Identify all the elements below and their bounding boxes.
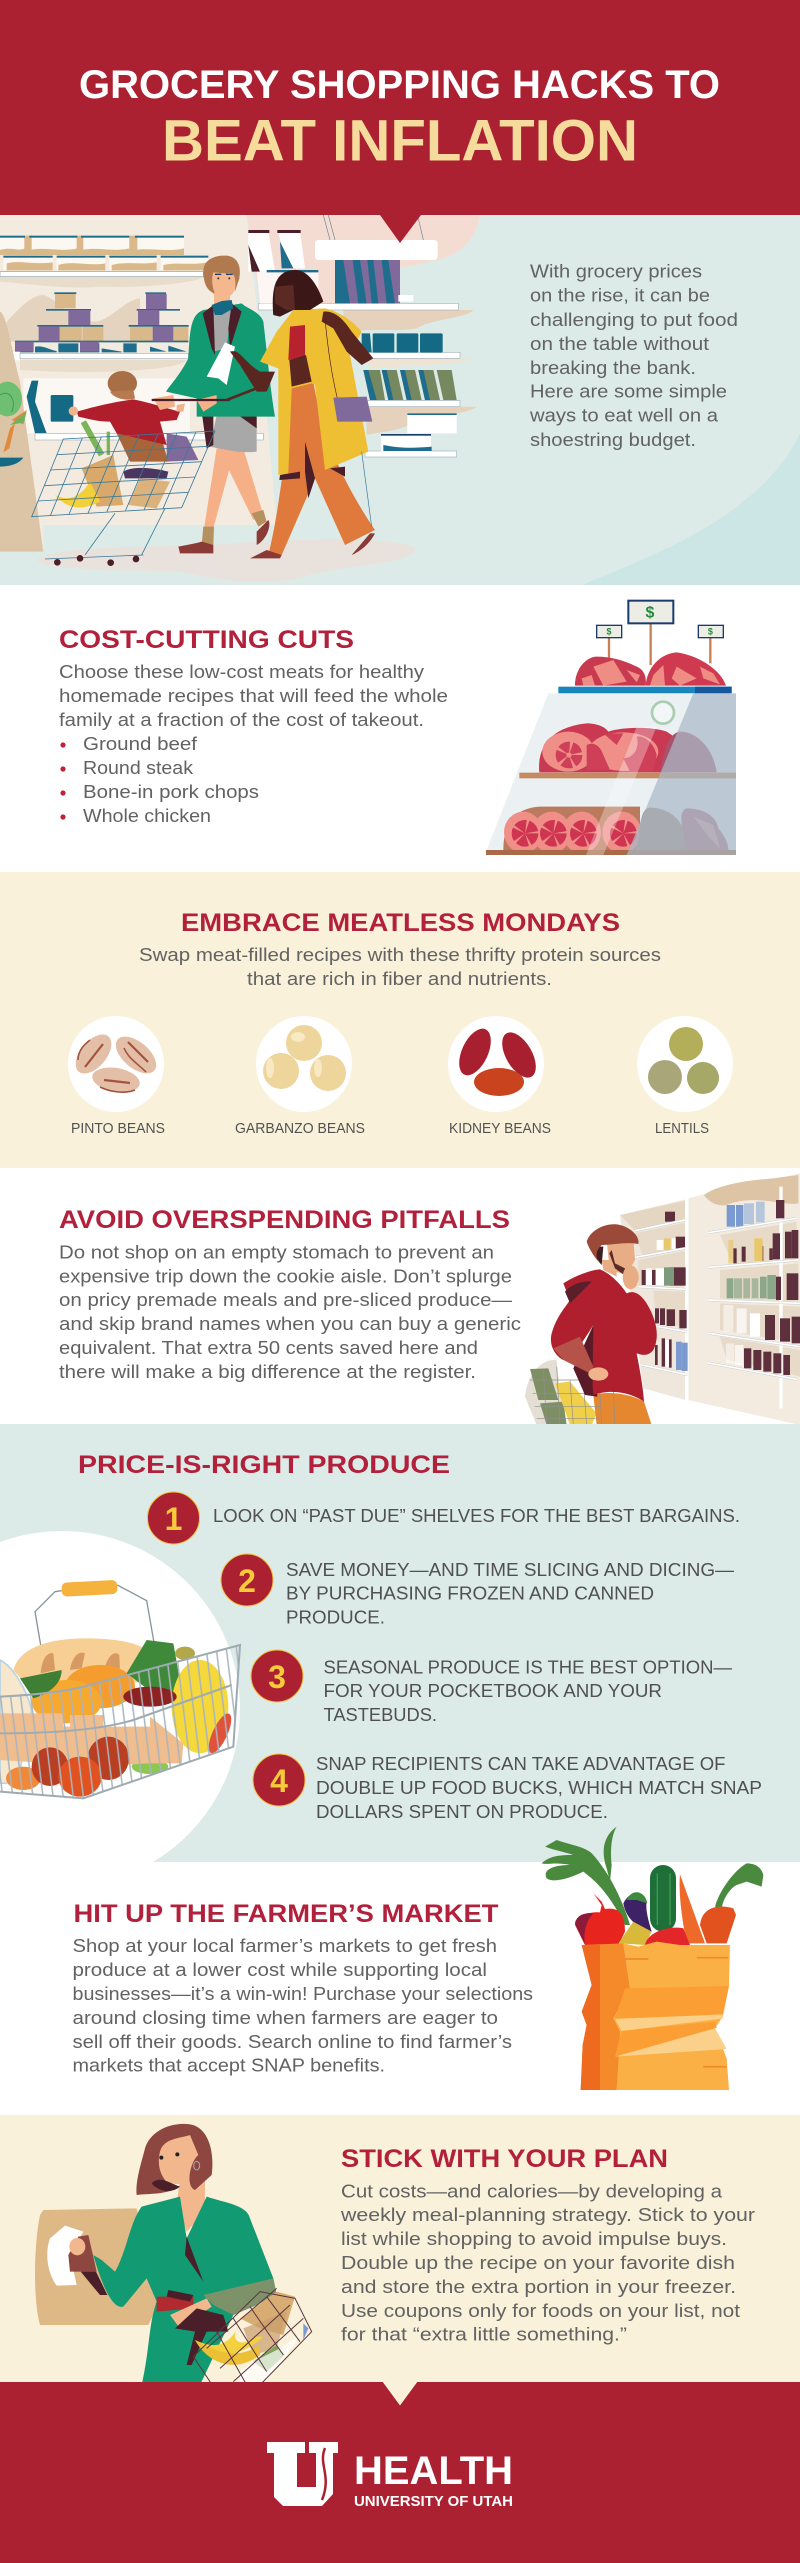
body text: list while shopping to avoid impulse buys. xyxy=(341,2229,727,2249)
subtitle xyxy=(139,945,661,989)
illustration: meat display case: $ xyxy=(646,605,655,622)
tip 3: TASTEBUDS. xyxy=(324,1705,437,1725)
tip 4: SNAP RECIPIENTS CAN TAKE ADVANTAGE OF xyxy=(316,1754,726,1774)
woman in yellow coat xyxy=(227,270,375,558)
body text and list xyxy=(59,662,448,826)
illustration: grocery bag with vegetables xyxy=(542,1827,763,2090)
pointer xyxy=(382,2381,418,2406)
body text: Cut costs—and calories—by developing a xyxy=(341,2182,723,2202)
body text: expensive trip down the cookie aisle. Don’t splurge xyxy=(59,1266,512,1286)
tip 2: SAVE MONEY—AND TIME SLICING AND DICING— xyxy=(286,1560,734,1580)
panel: embrace meatless mondays xyxy=(0,872,800,1168)
body text: produce at a lower cost while supporting local xyxy=(72,1960,487,1980)
body text: sell off their goods. Search online to find farmer’s xyxy=(72,2032,512,2052)
title banner: BEAT INFLATION xyxy=(162,109,638,174)
illustration: meat display case: $ xyxy=(606,626,611,636)
title banner: GROCERY SHOPPING HACKS TO xyxy=(79,63,720,107)
body text: for that “extra little something.” xyxy=(341,2325,627,2345)
subtitle: Swap meat-filled recipes with these thrifty protein sources xyxy=(139,945,661,965)
panel: cost-cutting cuts xyxy=(59,600,736,855)
illustration: woman with list and basket xyxy=(35,2124,312,2387)
illustration: meat display case: $ xyxy=(708,626,713,636)
icon: kidney beans xyxy=(448,1016,551,1137)
panel: price-is-right produce xyxy=(0,1424,800,1892)
icon: lentils: LENTILS xyxy=(655,1121,709,1137)
icon: pinto beans xyxy=(68,1016,165,1137)
panel: avoid overspending pitfalls xyxy=(0,1168,800,1425)
icon: lentils xyxy=(637,1016,733,1137)
icon: garbanzo beans: GARBANZO BEANS xyxy=(235,1121,365,1137)
tip 4: DOUBLE UP FOOD BUCKS, WHICH MATCH SNAP xyxy=(316,1778,762,1798)
body text: there will make a big difference at the register. xyxy=(59,1362,476,1382)
panel: hit up the farmer's market: HIT UP THE FARMER’S MARKET xyxy=(74,1900,498,1928)
intro text xyxy=(529,262,738,450)
tip 3: SEASONAL PRODUCE IS THE BEST OPTION— xyxy=(324,1658,732,1678)
illustration: man at shelves xyxy=(525,1173,800,1425)
logo: university of utah health xyxy=(267,2442,513,2510)
body text and list: family at a fraction of the cost of takeout. xyxy=(59,710,424,730)
panel: hit up the farmer's market xyxy=(72,1827,763,2090)
body text: Use coupons only for foods on your list, not xyxy=(341,2301,740,2321)
body text and list: Bone-in pork chops xyxy=(83,782,259,802)
tip 1: 1 xyxy=(165,1501,182,1537)
intro text: ways to eat well on a xyxy=(529,406,719,426)
tip 4 xyxy=(253,1754,762,1822)
panel: avoid overspending pitfalls: AVOID OVERSPENDING PITFALLS xyxy=(59,1206,510,1234)
illustration: meat display case xyxy=(486,601,736,855)
body text: businesses—it’s a win-win! Purchase your selections xyxy=(72,1984,533,2004)
body text: and store the extra portion in your freezer. xyxy=(341,2277,736,2297)
title banner xyxy=(0,0,800,243)
tip 1: LOOK ON “PAST DUE” SHELVES FOR THE BEST BARGAINS. xyxy=(213,1506,740,1526)
bottles xyxy=(642,1200,800,1375)
subtitle: that are rich in fiber and nutrients. xyxy=(247,969,552,989)
body text: around closing time when farmers are eager to xyxy=(72,2008,498,2028)
icon: pinto beans: PINTO BEANS xyxy=(71,1121,165,1137)
body text: equivalent. That extra 50 cents saved here and xyxy=(59,1338,478,1358)
panel: price-is-right produce: PRICE-IS-RIGHT PRODUCE xyxy=(78,1451,450,1479)
tip 4: DOLLARS SPENT ON PRODUCE. xyxy=(316,1802,608,1822)
tip 4: 4 xyxy=(270,1763,288,1799)
intro text: Here are some simple xyxy=(530,382,727,402)
panel: stick with your plan xyxy=(0,2115,800,2387)
tip 2: 2 xyxy=(238,1563,256,1599)
panel: stick with your plan: STICK WITH YOUR PLAN xyxy=(341,2145,668,2173)
footer banner xyxy=(0,2381,800,2563)
tip 3: FOR YOUR POCKETBOOK AND YOUR xyxy=(324,1681,662,1701)
intro text: shoestring budget. xyxy=(530,430,696,450)
body text and list: Choose these low-cost meats for healthy xyxy=(59,662,424,682)
tip 3: 3 xyxy=(268,1659,286,1695)
body text xyxy=(340,2182,755,2345)
shopping cart xyxy=(32,422,215,566)
body text xyxy=(72,1936,533,2076)
icon: kidney beans: KIDNEY BEANS xyxy=(449,1121,551,1137)
icon: garbanzo beans xyxy=(235,1016,365,1137)
body text: on pricy premade meals and pre-sliced produce— xyxy=(59,1290,512,1310)
illustration: produce basket xyxy=(0,1580,240,1798)
tip 2: PRODUCE. xyxy=(286,1608,385,1628)
man xyxy=(152,256,275,553)
body text: Do not shop on an empty stomach to prevent an xyxy=(59,1242,494,1262)
basket at man's side xyxy=(525,1360,563,1425)
tip 1 xyxy=(148,1492,740,1544)
body text and list: Round steak xyxy=(83,758,194,778)
body text and list: Whole chicken xyxy=(83,806,211,826)
tip 3 xyxy=(251,1650,732,1725)
body text and list: homemade recipes that will feed the whole xyxy=(59,686,448,706)
child in cart xyxy=(69,371,198,478)
body text and list: Ground beef xyxy=(83,734,198,754)
body text: and skip brand names when you can buy a generic xyxy=(59,1314,521,1334)
intro text: breaking the bank. xyxy=(530,358,696,378)
tip 2: BY PURCHASING FROZEN AND CANNED xyxy=(286,1584,654,1604)
body text: Double up the recipe on your favorite dish xyxy=(341,2253,735,2273)
body text xyxy=(59,1242,521,1382)
intro text: on the rise, it can be xyxy=(530,286,710,306)
body text: weekly meal-planning strategy. Stick to your xyxy=(340,2205,755,2225)
logo: university of utah health: UNIVERSITY OF UTAH xyxy=(354,2493,513,2510)
intro text: on the table without xyxy=(530,334,709,354)
body text: Shop at your local farmer’s markets to get fresh xyxy=(72,1936,497,1956)
panel: cost-cutting cuts: COST-CUTTING CUTS xyxy=(59,626,354,654)
intro text: challenging to put food xyxy=(530,310,738,330)
body text: markets that accept SNAP benefits. xyxy=(72,2056,385,2076)
panel: hero intro xyxy=(0,215,800,585)
illustration: shoppers in store aisle xyxy=(0,215,480,582)
tip 2 xyxy=(221,1554,734,1628)
logo: university of utah health: HEALTH xyxy=(354,2449,513,2493)
intro text: With grocery prices xyxy=(530,262,702,282)
panel: embrace meatless mondays: EMBRACE MEATLESS MONDAYS xyxy=(181,909,620,937)
